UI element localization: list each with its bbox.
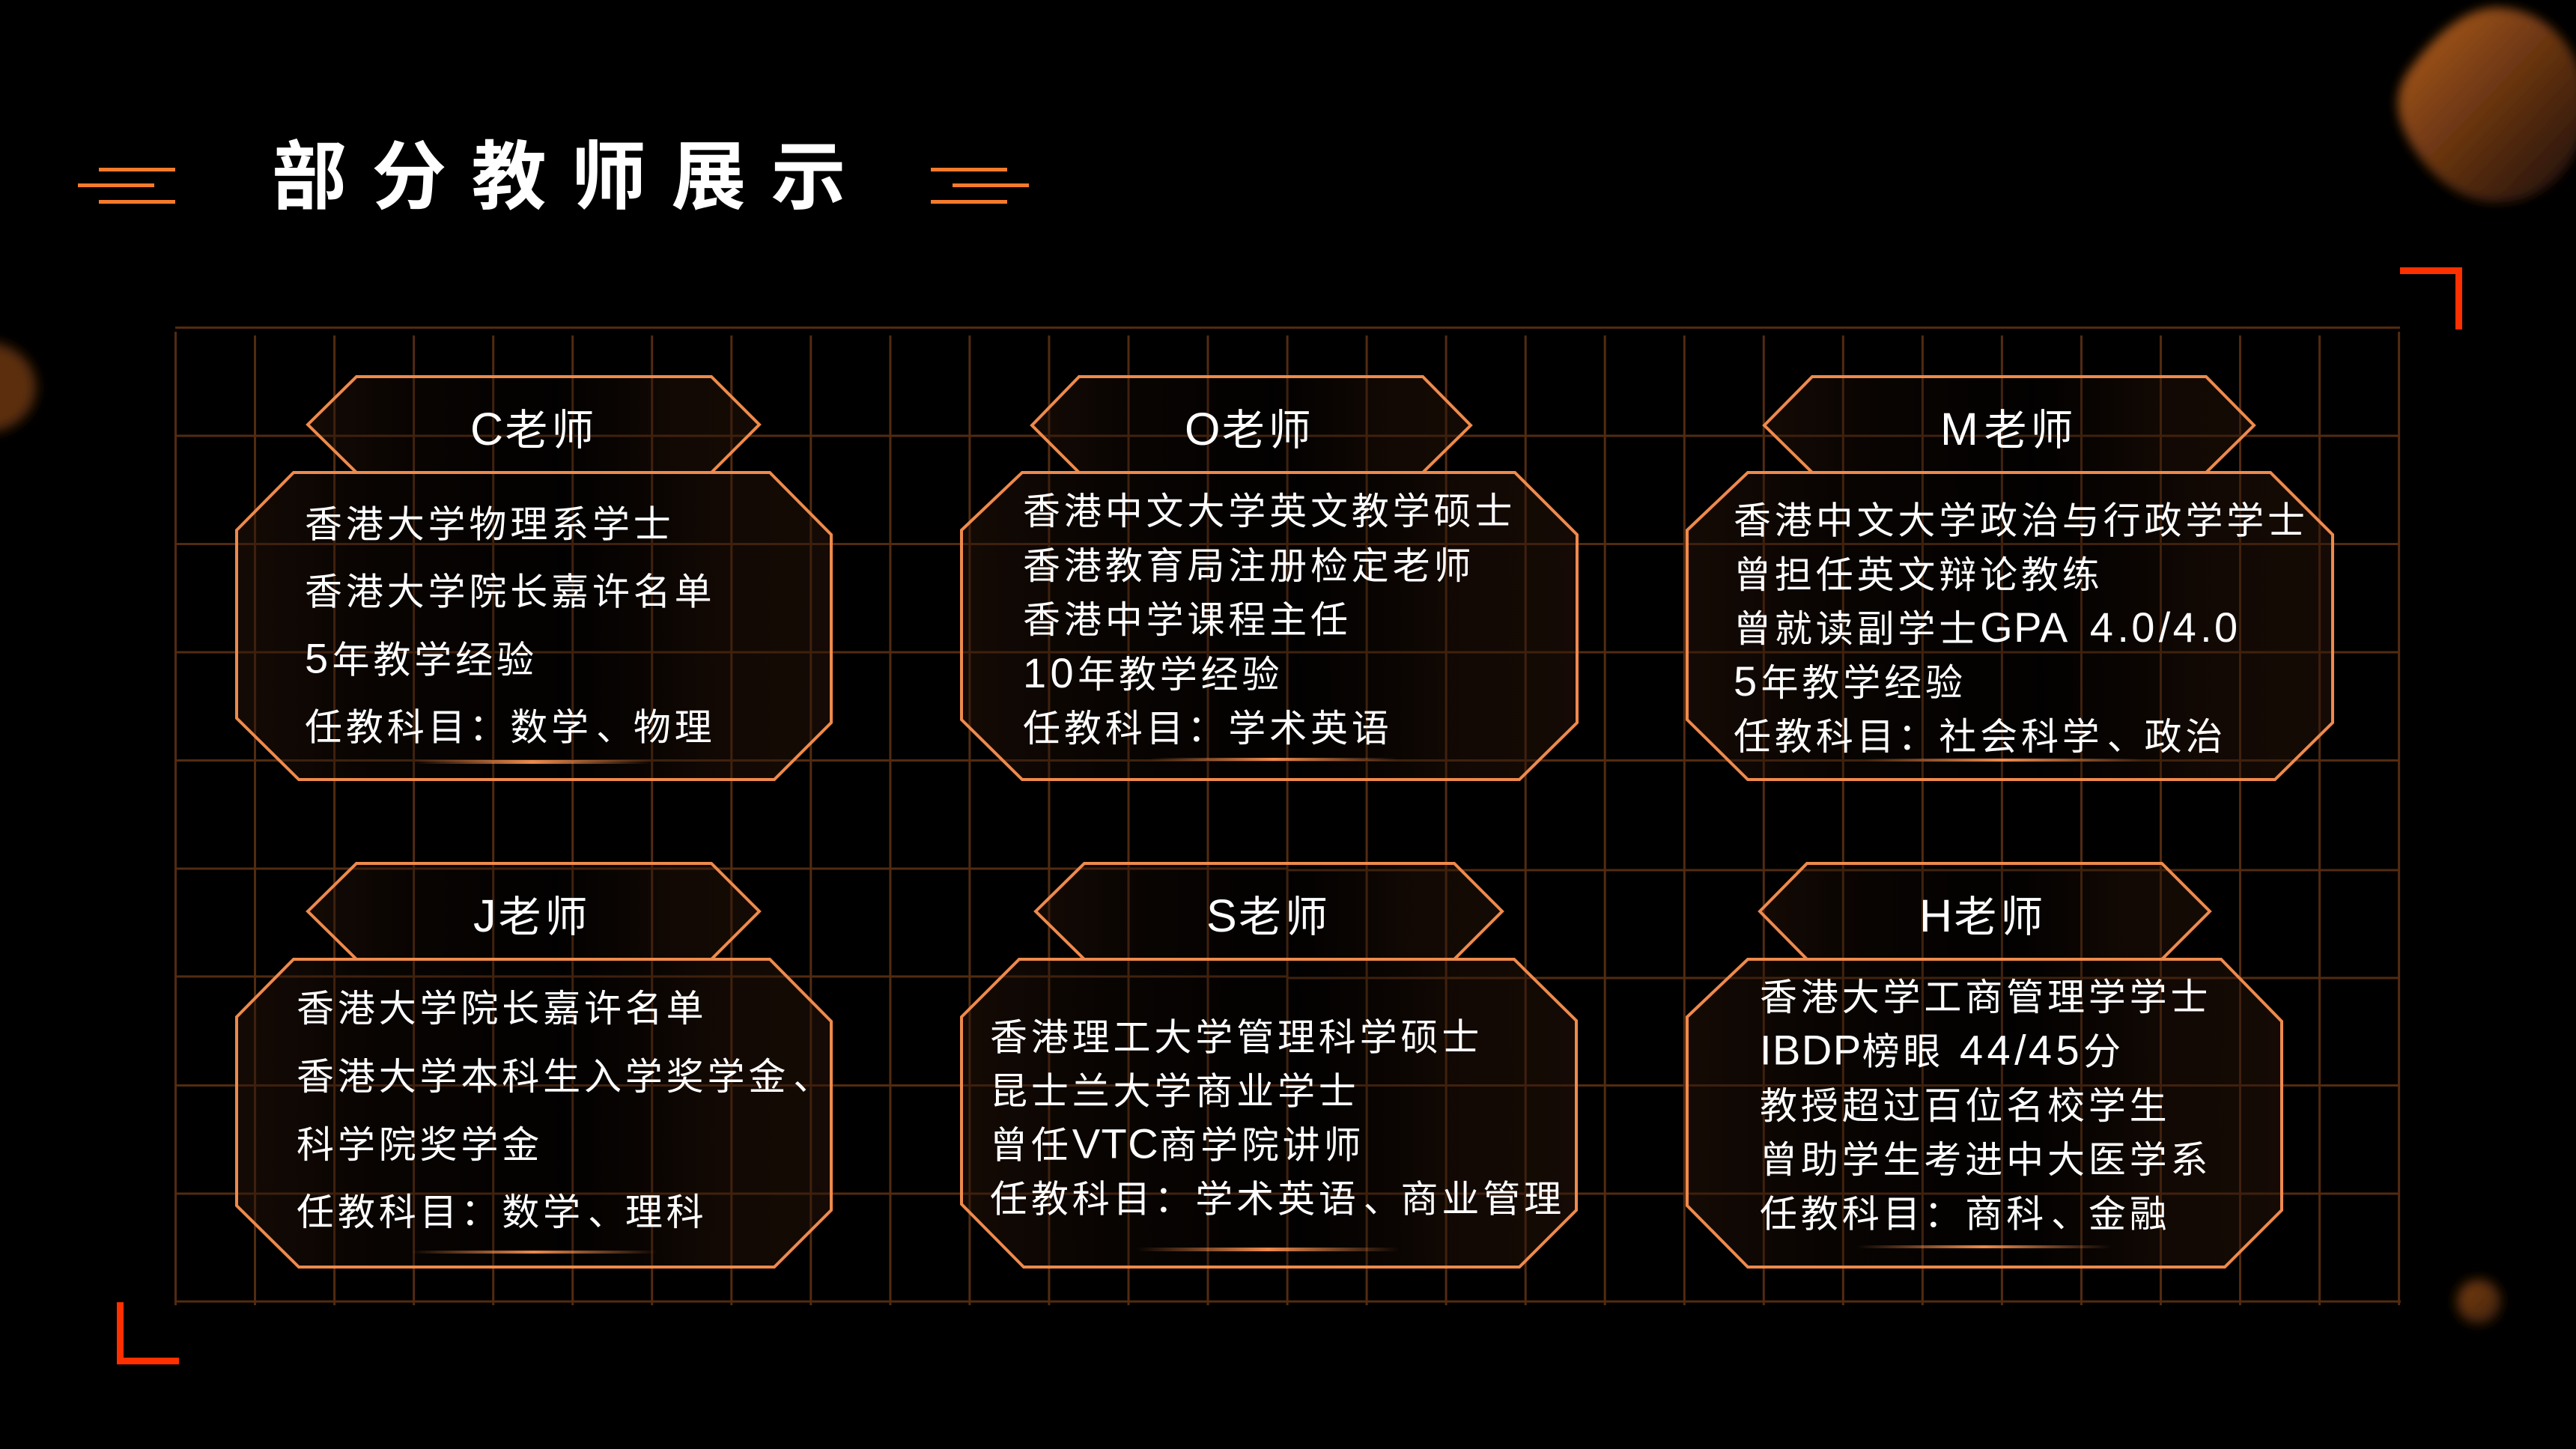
- O body: [962, 473, 1577, 780]
- M name: M老师: [1940, 404, 2077, 455]
- C details: 任教科目：数学、物理: [305, 707, 716, 749]
- blob: bottom right planet: [2457, 1280, 2500, 1323]
- C details: 香港大学院长嘉许名单: [305, 571, 716, 613]
- grid background: [175, 328, 2401, 1305]
- J body: [237, 959, 831, 1267]
- H header badge: [1760, 863, 2210, 959]
- H details: 香港大学工商管理学学士: [1760, 976, 2211, 1018]
- M details: [1734, 500, 2309, 758]
- M details: 曾就读副学士GPA 4.0/4.0: [1734, 604, 2242, 651]
- O details: 香港教育局注册检定老师: [1023, 545, 1474, 587]
- S details: [990, 1017, 1565, 1221]
- S name: S老师: [1206, 890, 1331, 941]
- panel: C teacher: [237, 377, 831, 780]
- H accent line: [1856, 1245, 2111, 1248]
- panel: S teacher: [962, 863, 1576, 1267]
- J details: [297, 988, 834, 1233]
- J details: 科学院奖学金: [297, 1124, 543, 1166]
- O details: 香港中文大学英文教学硕士: [1023, 490, 1516, 532]
- S details: 任教科目：学术英语、商业管理: [990, 1179, 1565, 1221]
- J accent line: [410, 1251, 657, 1254]
- C details: 香港大学物理系学士: [305, 503, 675, 545]
- corner bracket: top right: [2400, 271, 2459, 329]
- O details: 10年教学经验: [1023, 649, 1283, 696]
- M details: 香港中文大学政治与行政学学士: [1734, 500, 2309, 542]
- S body: [962, 959, 1576, 1267]
- O details: 任教科目：学术英语: [1023, 708, 1393, 750]
- S details: 香港理工大学管理科学硕士: [990, 1017, 1483, 1059]
- C name: C老师: [470, 404, 598, 455]
- O header badge: [1032, 377, 1471, 473]
- M details: 曾担任英文辩论教练: [1734, 554, 2103, 596]
- title decoration: left lines: [78, 168, 175, 204]
- M details: 任教科目：社会科学、政治: [1734, 716, 2226, 758]
- S details: 昆士兰大学商业学士: [990, 1071, 1360, 1113]
- J name: J老师: [473, 890, 592, 941]
- H details: 曾助学生考进中大医学系: [1760, 1139, 2211, 1181]
- blob: top right planet: [2398, 7, 2576, 202]
- O name: O老师: [1185, 404, 1315, 455]
- M accent line: [1865, 759, 2142, 762]
- C accent line: [413, 760, 651, 764]
- J header badge: [308, 863, 759, 959]
- H details: 任教科目：商科、金融: [1760, 1194, 2171, 1236]
- M body: [1687, 473, 2333, 780]
- panel: H teacher: [1687, 863, 2282, 1267]
- title decoration: right lines: [931, 168, 1029, 204]
- panel: M teacher: [1687, 377, 2333, 780]
- C body: [237, 473, 831, 780]
- S accent line: [1137, 1248, 1399, 1251]
- panel: O teacher: [962, 377, 1577, 780]
- O accent line: [1150, 758, 1397, 761]
- J details: 香港大学院长嘉许名单: [297, 988, 707, 1030]
- H details: IBDP榜眼 44/45分: [1760, 1026, 2124, 1074]
- C header badge: [308, 377, 759, 473]
- C details: [305, 503, 716, 749]
- H details: 教授超过百位名校学生: [1760, 1085, 2170, 1127]
- blob: left edge planet: [0, 342, 36, 432]
- S header badge: [1036, 863, 1502, 959]
- corner bracket: bottom left: [120, 1302, 179, 1361]
- M details: 5年教学经验: [1734, 657, 1966, 705]
- S details: 曾任VTC商学院讲师: [990, 1120, 1364, 1167]
- H name: H老师: [1919, 890, 2047, 941]
- J details: 香港大学本科生入学奖学金、: [297, 1056, 834, 1098]
- title: 部分教师展示: [272, 136, 871, 219]
- M header badge: [1764, 377, 2254, 473]
- H body: [1687, 959, 2282, 1267]
- H details: [1760, 976, 2211, 1236]
- J details: 任教科目：数学、理科: [297, 1191, 708, 1233]
- O details: [1023, 490, 1516, 750]
- panel: J teacher: [237, 863, 834, 1267]
- O details: 香港中学课程主任: [1023, 599, 1352, 641]
- C details: 5年教学经验: [305, 635, 538, 681]
